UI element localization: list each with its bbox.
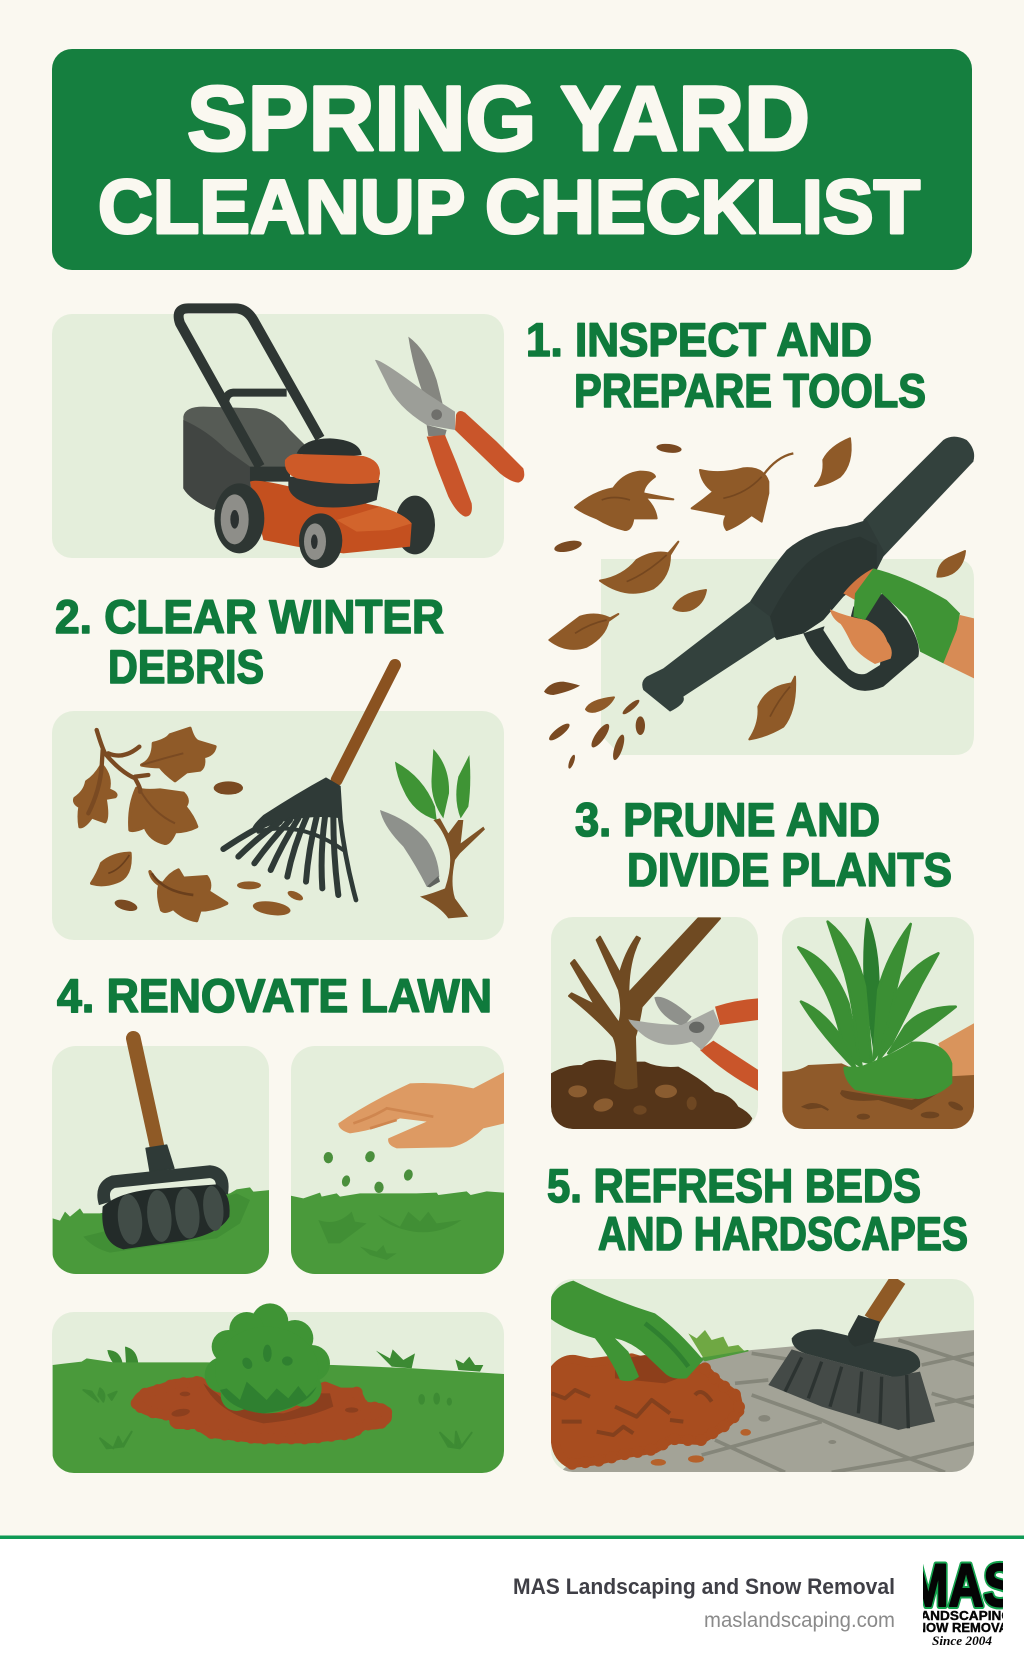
panel: mulched shrub on lawn xyxy=(52,1303,505,1473)
illustration: leaf rake xyxy=(223,665,395,900)
panel: blower background xyxy=(601,559,974,755)
title banner: CLEANUP CHECKLIST xyxy=(98,165,920,250)
heading: step 1 xyxy=(526,313,926,417)
heading: step 5 xyxy=(547,1159,968,1260)
heading: step 1: PREPARE TOOLS xyxy=(574,364,926,417)
logo xyxy=(923,1560,1003,1645)
panel: dividing plants xyxy=(782,917,975,1130)
logo: Since 2004 xyxy=(932,1633,992,1648)
heading: step 2 xyxy=(55,590,444,693)
heading: step 5: 5. REFRESH BEDS xyxy=(547,1159,921,1212)
panel: refresh beds and hardscapes xyxy=(550,1279,975,1473)
footer xyxy=(0,1536,1024,1666)
logo: SNOW REMOVAL xyxy=(908,1620,1016,1635)
heading: step 2: DEBRIS xyxy=(108,640,264,693)
panel: inspect tools background xyxy=(52,314,504,558)
illustration: blowing leaves xyxy=(544,438,965,769)
heading: step 1: 1. INSPECT AND xyxy=(526,313,872,366)
heading: step 3 xyxy=(575,793,952,896)
company name: MAS Landscaping and Snow Removal xyxy=(513,1574,895,1599)
panel: lawn roller xyxy=(52,1038,270,1275)
panel: pruning tree xyxy=(551,917,758,1129)
illustration: oak leaves and branch xyxy=(75,728,304,921)
illustration: lawn mower xyxy=(179,308,435,568)
logo: LANDSCAPING xyxy=(912,1608,1012,1623)
heading: step 3: DIVIDE PLANTS xyxy=(627,843,952,896)
panel: clear debris background xyxy=(52,711,504,940)
heading: step 2: 2. CLEAR WINTER xyxy=(55,590,444,643)
website: maslandscaping.com xyxy=(704,1609,895,1632)
title banner: SPRING YARD xyxy=(187,68,810,170)
illustration: leaf blower with gloved hand xyxy=(642,437,974,712)
heading: step 3: 3. PRUNE AND xyxy=(575,793,880,846)
title banner xyxy=(52,49,972,270)
panel: hand spreading seed xyxy=(291,1046,505,1275)
illustration: pruned sapling and knife xyxy=(380,749,485,918)
illustration: hand shears xyxy=(375,337,524,517)
heading: step 4: 4. RENOVATE LAWN xyxy=(57,969,492,1022)
